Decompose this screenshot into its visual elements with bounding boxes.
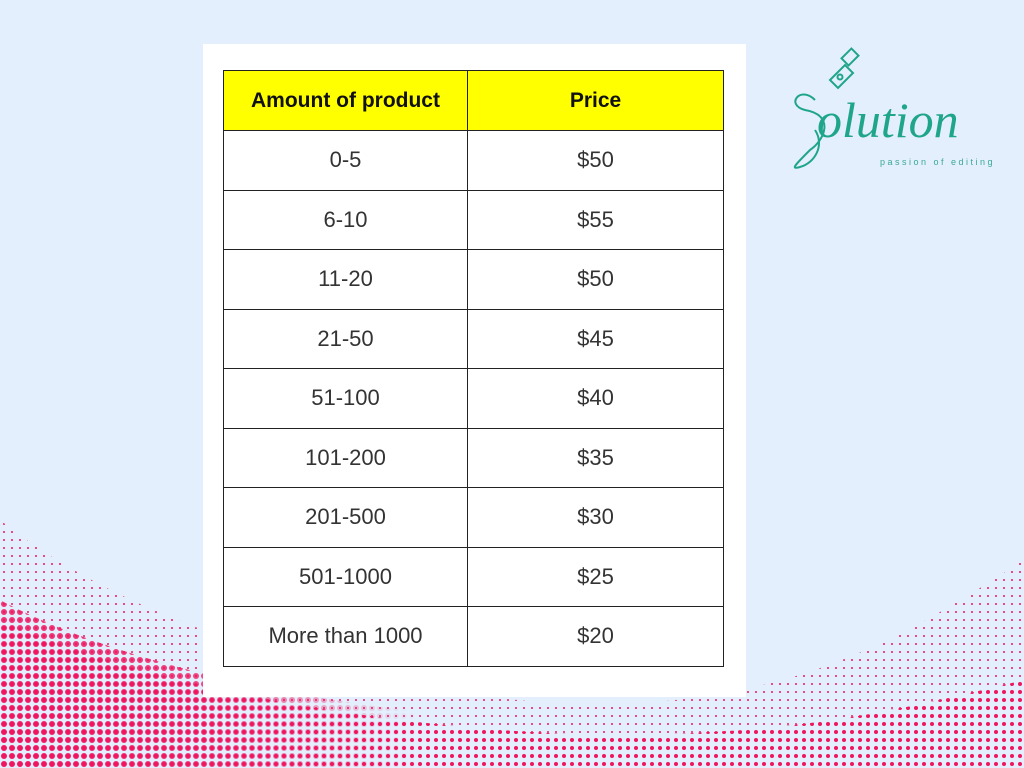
table (223, 70, 724, 667)
logo: passion of editing (880, 157, 995, 167)
logo (794, 47, 995, 169)
table: $25 (577, 564, 614, 589)
table: $50 (577, 266, 614, 291)
table: $20 (577, 623, 614, 648)
table: Amount of product (251, 88, 440, 112)
table: 0-5 (330, 147, 361, 172)
table: 101-200 (305, 445, 386, 470)
table: 201-500 (305, 504, 386, 529)
table: 21-50 (317, 326, 374, 351)
table: $55 (577, 207, 614, 232)
table: 51-100 (311, 385, 380, 410)
panel: price table (203, 44, 746, 697)
table: $30 (577, 504, 614, 529)
table: More than 1000 (268, 623, 423, 648)
table: 501-1000 (299, 564, 392, 589)
table: 11-20 (318, 266, 373, 291)
table: $35 (577, 445, 614, 470)
table: $50 (577, 147, 614, 172)
table: $40 (577, 385, 614, 410)
icon: pen nib (795, 49, 858, 168)
table: Price (570, 88, 621, 112)
table: 6-10 (323, 207, 368, 232)
logo text: olution (817, 92, 959, 148)
table: $45 (577, 326, 614, 351)
